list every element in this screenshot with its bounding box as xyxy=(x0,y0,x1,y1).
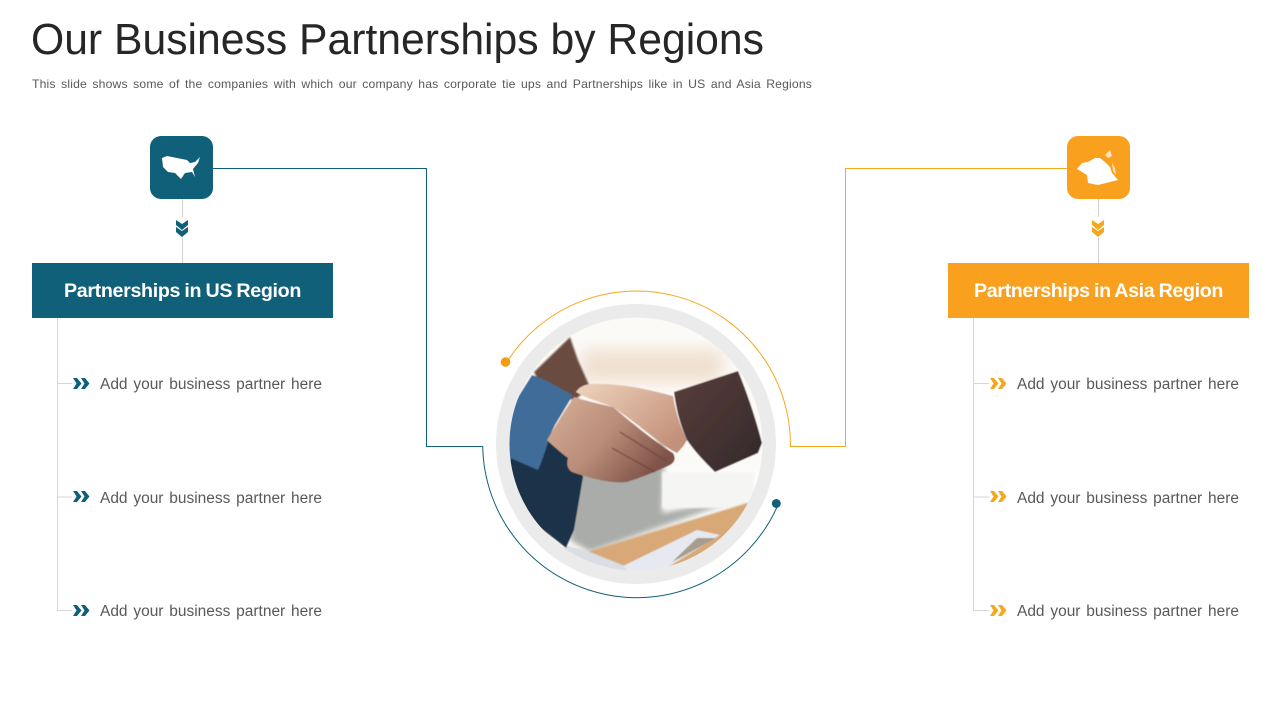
title: Our Business Partnerships by Regions xyxy=(31,15,764,64)
icon: Asia map xyxy=(1067,136,1130,199)
connector stem xyxy=(1098,199,1100,263)
connector: US region to centre xyxy=(213,168,781,598)
partner item 2: Add your business partner here xyxy=(100,490,322,507)
connector stem xyxy=(182,199,184,263)
connector: Asia region to centre xyxy=(501,168,1067,446)
partner item 3: Add your business partner here xyxy=(100,603,322,620)
partner list: Asia xyxy=(974,318,1239,620)
icon: down chevrons xyxy=(1090,217,1106,238)
heading bar: Asia xyxy=(948,263,1249,318)
central photo: handshake xyxy=(503,311,770,592)
partner item 2: Add your business partner here xyxy=(1017,490,1239,507)
heading bar: US xyxy=(32,263,333,318)
partner item 1: Add your business partner here xyxy=(100,376,322,393)
heading bar: US: Partnerships in US Region xyxy=(64,280,301,302)
partner item 1: Add your business partner here xyxy=(1017,376,1239,393)
partner list: US xyxy=(58,318,322,620)
subtitle: This slide shows some of the companies with which our company has corporate tie ups and Partnerships like in US and Asia Regions xyxy=(32,77,812,91)
partner item 3: Add your business partner here xyxy=(1017,603,1239,620)
heading bar: Asia: Partnerships in Asia Region xyxy=(974,280,1223,302)
icon: down chevrons xyxy=(174,217,190,238)
icon: US map xyxy=(150,136,213,199)
panel: Asia region xyxy=(948,136,1249,620)
panel: US region xyxy=(32,136,333,620)
